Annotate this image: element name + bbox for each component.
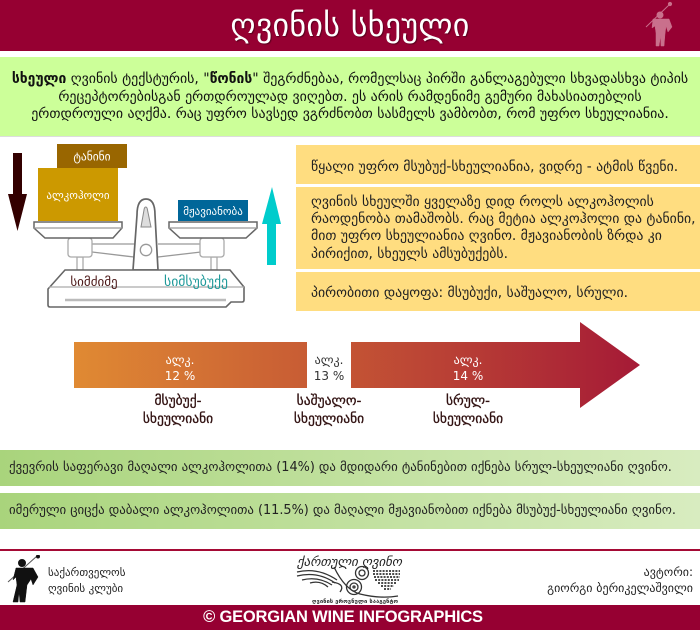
label: medium-bodied: სხეულიანი	[294, 411, 364, 427]
label: light-bodied: მსუბუქ-	[154, 393, 202, 409]
label: full-bodied: სხეულიანი	[433, 411, 503, 427]
scale label: heavy: სიმძიმე	[70, 275, 118, 290]
note text: მით უფრო სხეულიანია ღვინო. მჟავიანობის ზრდა კი	[311, 228, 662, 244]
intro text: ერთდროული აღქმა. რაც უფრო სავსედ ვგრძნობთ სასმელს ვამბობთ, რომ უფრო სხეულიანია.	[31, 106, 669, 122]
intro text	[12, 71, 688, 122]
author credit	[547, 565, 693, 595]
box: acidity	[178, 200, 248, 221]
box: alcohol: ალკოჰოლი	[46, 189, 110, 202]
label: medium-bodied	[294, 393, 364, 427]
label: full-bodied: სრულ-	[446, 392, 490, 409]
logo: national wine agency	[296, 555, 403, 605]
footer band	[0, 605, 700, 630]
header band	[0, 0, 700, 51]
arrow left segment	[74, 342, 307, 388]
value: 12 percent	[165, 353, 195, 383]
value: 14 percent: ალკ.	[454, 353, 482, 367]
logo ornament	[297, 566, 400, 597]
example: saperavi	[0, 450, 700, 486]
value: 14 percent	[453, 353, 483, 383]
intro panel	[0, 57, 700, 137]
author credit: გიორგი ბერიკელაშვილი	[547, 581, 693, 595]
gradient arrow chart	[74, 322, 640, 427]
box: tannin	[57, 144, 127, 168]
note text	[311, 194, 696, 262]
note: water	[296, 145, 700, 184]
club name: ღვინის კლუბი	[48, 582, 123, 594]
note: classification	[296, 272, 700, 311]
box: tannin: ტანინი	[73, 150, 111, 164]
box: acidity: მჟავიანობა	[183, 205, 243, 218]
title: ღვინის სხეული	[230, 6, 470, 44]
arrow right segment	[351, 322, 640, 408]
example: tsitska	[0, 493, 700, 529]
example text: ქვევრის საფერავი მაღალი ალკოჰოლითა (14%) და მდიდარი ტანინებით იქნება სრულ-სხეულიანი ღვინო.	[9, 460, 672, 475]
note text: წყალი უფრო მსუბუქ-სხეულიანია, ვიდრე - ატმის წვენი.	[311, 158, 678, 174]
club name: საქართველოს	[48, 566, 125, 579]
icon: faded winemaker figure	[646, 2, 672, 46]
label: light-bodied: სხეულიანი	[143, 411, 213, 427]
icon: winemaker silhouette	[8, 555, 40, 602]
arrow: down	[8, 153, 27, 231]
value: 13 percent: ალკ.	[315, 353, 343, 367]
note: alcohol role	[296, 187, 700, 269]
label: medium-bodied: საშუალო-	[297, 393, 361, 409]
scale label: light: სიმსუბუქე	[164, 274, 228, 290]
logo heading: ქართული ღვინო	[296, 555, 403, 570]
copyright: © GEORGIAN WINE INFOGRAPHICS	[203, 608, 483, 626]
value: 12 percent: ალკ.	[166, 353, 194, 367]
note text: ღვინის სხეულში ყველაზე დიდ როლს ალკოჰოლის	[311, 194, 654, 210]
label: light-bodied	[143, 393, 213, 427]
example text: იმერული ციცქა დაბალი ალკოჰოლითა (11.5%) და მაღალი მჟავიანობით იქნება მსუბუქ-სხეულიანი ღვინო.	[9, 503, 676, 518]
logo caption: ღვინის ეროვნული სააგენტო	[312, 598, 399, 605]
balance scale diagram	[8, 144, 281, 308]
value: 13 percent	[314, 353, 344, 383]
author credit: ავტორი:	[644, 565, 693, 579]
note text: პირობითი დაყოფა: მსუბუქი, საშუალო, სრული.	[311, 284, 628, 300]
value: 12 percent: 12 %	[165, 369, 195, 383]
label: full-bodied	[433, 392, 503, 427]
note text: პირიქით, სხეულს ამსუბუქებს.	[311, 246, 508, 262]
footer rule	[0, 549, 700, 551]
note text: რაოდენობა თამაშობს. რაც მეტია ალკოჰოლი და ტანინი,	[311, 211, 696, 227]
value: 13 percent: 13 %	[314, 369, 344, 383]
box: alcohol	[38, 168, 118, 221]
intro text: რეცეპტორებისგან ერთდროულად ვიღებთ. ეს არის რამდენიმე გემური მახასიათებლის	[58, 88, 642, 104]
club name	[48, 566, 125, 594]
intro text: სხეული ღვინის ტექსტურის, "წონის" შეგრძნებაა, რომელსაც პირში განლაგებული სხვადასხვა ტიპის	[12, 71, 688, 87]
scale body	[34, 199, 257, 307]
arrow: up	[262, 187, 281, 265]
value: 14 percent: 14 %	[453, 369, 483, 383]
